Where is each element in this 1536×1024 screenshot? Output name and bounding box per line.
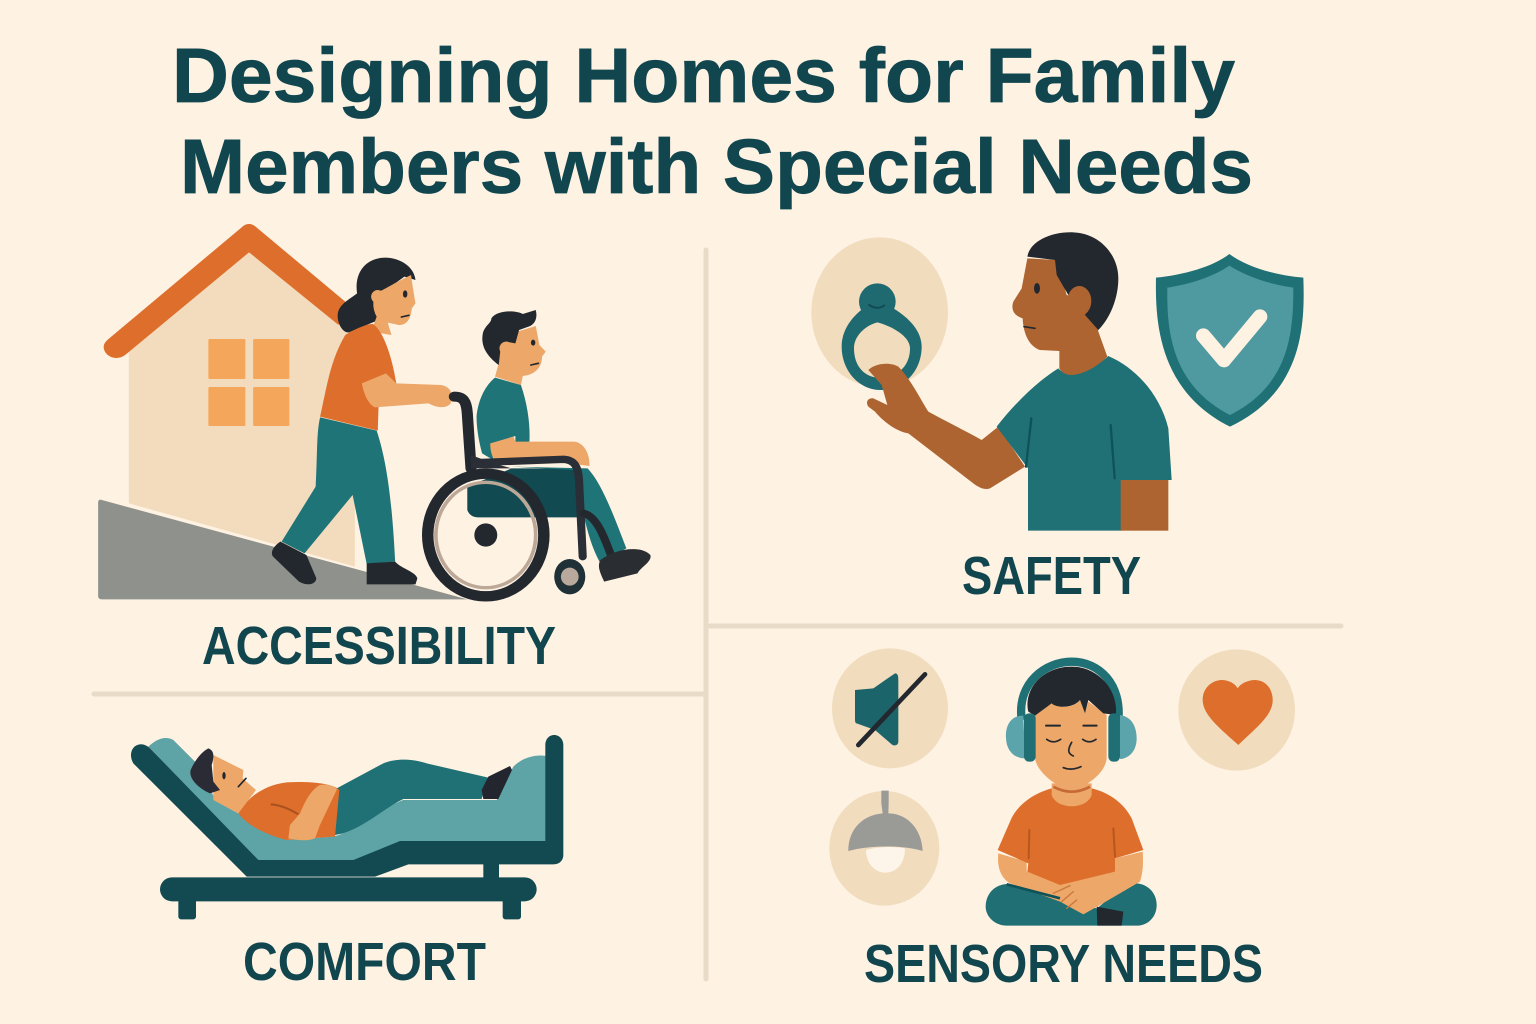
ramp [98,500,467,599]
child [986,662,1157,926]
panel: sensory needs [829,648,1295,994]
icon: ceiling lamp [829,791,939,906]
illustration: child with headphones and sensory icons [829,648,1295,926]
panel: comfort [131,735,563,992]
label: accessibility: ACCESSIBILITY [202,616,556,676]
label: sensory needs: SENSORY NEEDS [864,934,1263,994]
caregiver [272,258,452,584]
icon: heart [1178,649,1295,771]
person [867,232,1172,531]
wheelchair user [428,310,651,596]
bed [131,735,563,919]
panel: accessibility [98,224,651,676]
icon: house [104,224,355,567]
illustration: person resting on adjustable bed [131,735,563,919]
label: comfort: COMFORT [243,932,486,992]
title [172,33,1253,210]
title: Members with Special Needs [180,124,1253,210]
illustration: person touching door knocker, with shield [811,232,1304,531]
icon: shield with check mark [1156,254,1304,427]
resting person [190,748,512,840]
label: safety: SAFETY [962,546,1141,606]
panel: safety [811,232,1304,606]
icon: muted speaker [832,648,948,768]
icon: door knocker [811,237,948,390]
illustration: house, ramp, caregiver and wheelchair user [98,224,651,599]
title: Designing Homes for Family [172,33,1235,119]
